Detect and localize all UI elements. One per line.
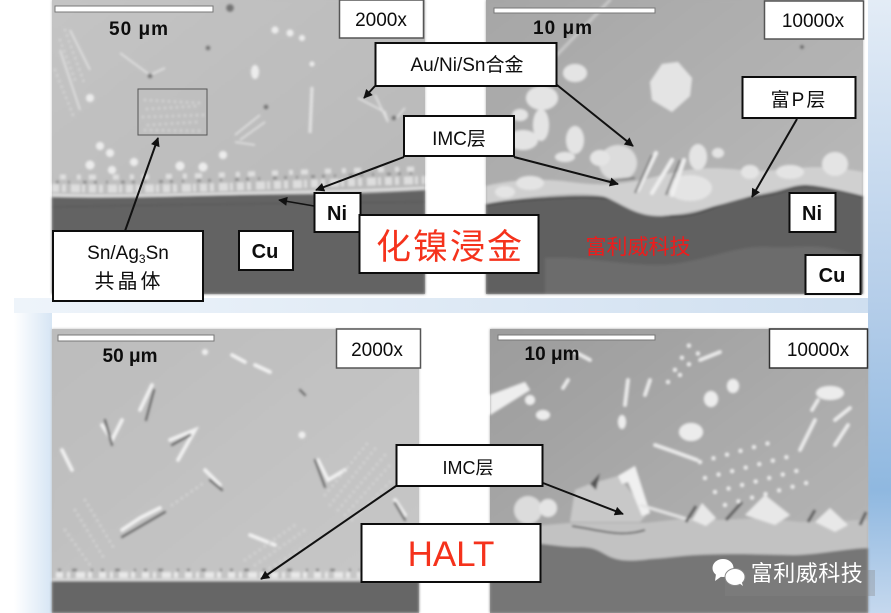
label: 10000x bottom xyxy=(770,329,868,368)
text: account name: 富利威科技 xyxy=(751,561,863,586)
arrow: Ni top left xyxy=(279,200,314,206)
region box: eutectic area xyxy=(138,89,207,135)
panel: bottom right micrograph 10000x xyxy=(490,329,868,613)
icon: WeChat xyxy=(712,559,745,586)
label: electroless nickel immersion gold xyxy=(360,215,538,273)
arrow: Sn/Ag3Sn to region xyxy=(125,138,158,231)
arrow: IMC to bottom right interface xyxy=(543,483,623,514)
label: Au/Ni/Sn alloy xyxy=(376,43,556,86)
label: HALT: HALT xyxy=(408,535,494,574)
scale bar: bottom left 50 um: 50 μm xyxy=(103,346,157,367)
label: Sn/Ag3Sn eutectic: Sn xyxy=(146,243,169,264)
label: Ni top left: Ni xyxy=(327,203,347,225)
panel: top right micrograph 10000x xyxy=(486,0,863,294)
label: Sn/Ag3Sn eutectic: Sn/Ag xyxy=(87,243,139,264)
scale bar: top right 10 um xyxy=(494,8,655,39)
panel: bottom left micrograph 2000x xyxy=(52,329,419,613)
label: 2000x bottom xyxy=(336,329,420,368)
arrow: IMC to top right interface xyxy=(514,157,618,184)
scale bar: top left 50 um xyxy=(55,6,213,40)
scale bar: bottom left 50 um xyxy=(58,335,214,367)
watermark: WeChat logo and name xyxy=(712,559,875,596)
label: Cu top left xyxy=(239,231,293,270)
label: electroless nickel immersion gold: 化镍浸金 xyxy=(376,228,524,267)
text: red watermark: 富利威科技 xyxy=(586,236,690,259)
label: Ni top right: Ni xyxy=(802,203,822,225)
arrow: IMC to top left interface xyxy=(316,157,404,190)
label: 10000x bottom: 10000x xyxy=(787,340,850,361)
label: Cu top right: Cu xyxy=(819,265,845,287)
label: IMC layer bottom xyxy=(396,445,542,486)
arrow: Au/Ni/Sn to left alloy xyxy=(364,86,375,98)
label: Ni top left xyxy=(314,193,360,232)
scale bar: bottom right 10 um xyxy=(498,335,655,365)
label: Cu top right xyxy=(806,255,860,294)
label: 2000x bottom: 2000x xyxy=(351,340,403,361)
label: IMC layer top xyxy=(404,116,514,156)
scale bar: bottom right 10 um: 10 μm xyxy=(525,344,579,365)
label: P-rich layer: 富P层 xyxy=(771,89,827,111)
label: Sn/Ag3Sn eutectic xyxy=(53,231,203,301)
arrow: Au/Ni/Sn to right alloy xyxy=(557,85,633,146)
panel: top left micrograph 2000x xyxy=(52,0,425,294)
arrow: IMC to bottom left interface xyxy=(261,486,396,579)
scale bar: top left 50 um: 50 μm xyxy=(109,19,169,40)
label: Sn/Ag3Sn eutectic: 共晶体 xyxy=(94,270,164,293)
label: Ni top right xyxy=(790,193,836,232)
label: 2000x top: 2000x xyxy=(355,10,407,31)
label: HALT xyxy=(362,524,540,582)
arrow: P-rich layer xyxy=(752,119,797,197)
label: IMC layer top: IMC层 xyxy=(432,129,486,150)
label: 10000x top xyxy=(764,1,864,39)
label: P-rich layer xyxy=(742,77,856,118)
label: IMC layer bottom: IMC层 xyxy=(442,458,494,478)
scale bar: top right 10 um: 10 μm xyxy=(533,18,593,39)
label: Cu top left: Cu xyxy=(252,241,278,263)
label: Sn/Ag3Sn eutectic: 3 xyxy=(139,252,146,266)
label: 10000x top: 10000x xyxy=(782,11,845,32)
label: 2000x top xyxy=(340,0,424,38)
label: Au/Ni/Sn alloy: Au/Ni/Sn合金 xyxy=(411,54,523,76)
